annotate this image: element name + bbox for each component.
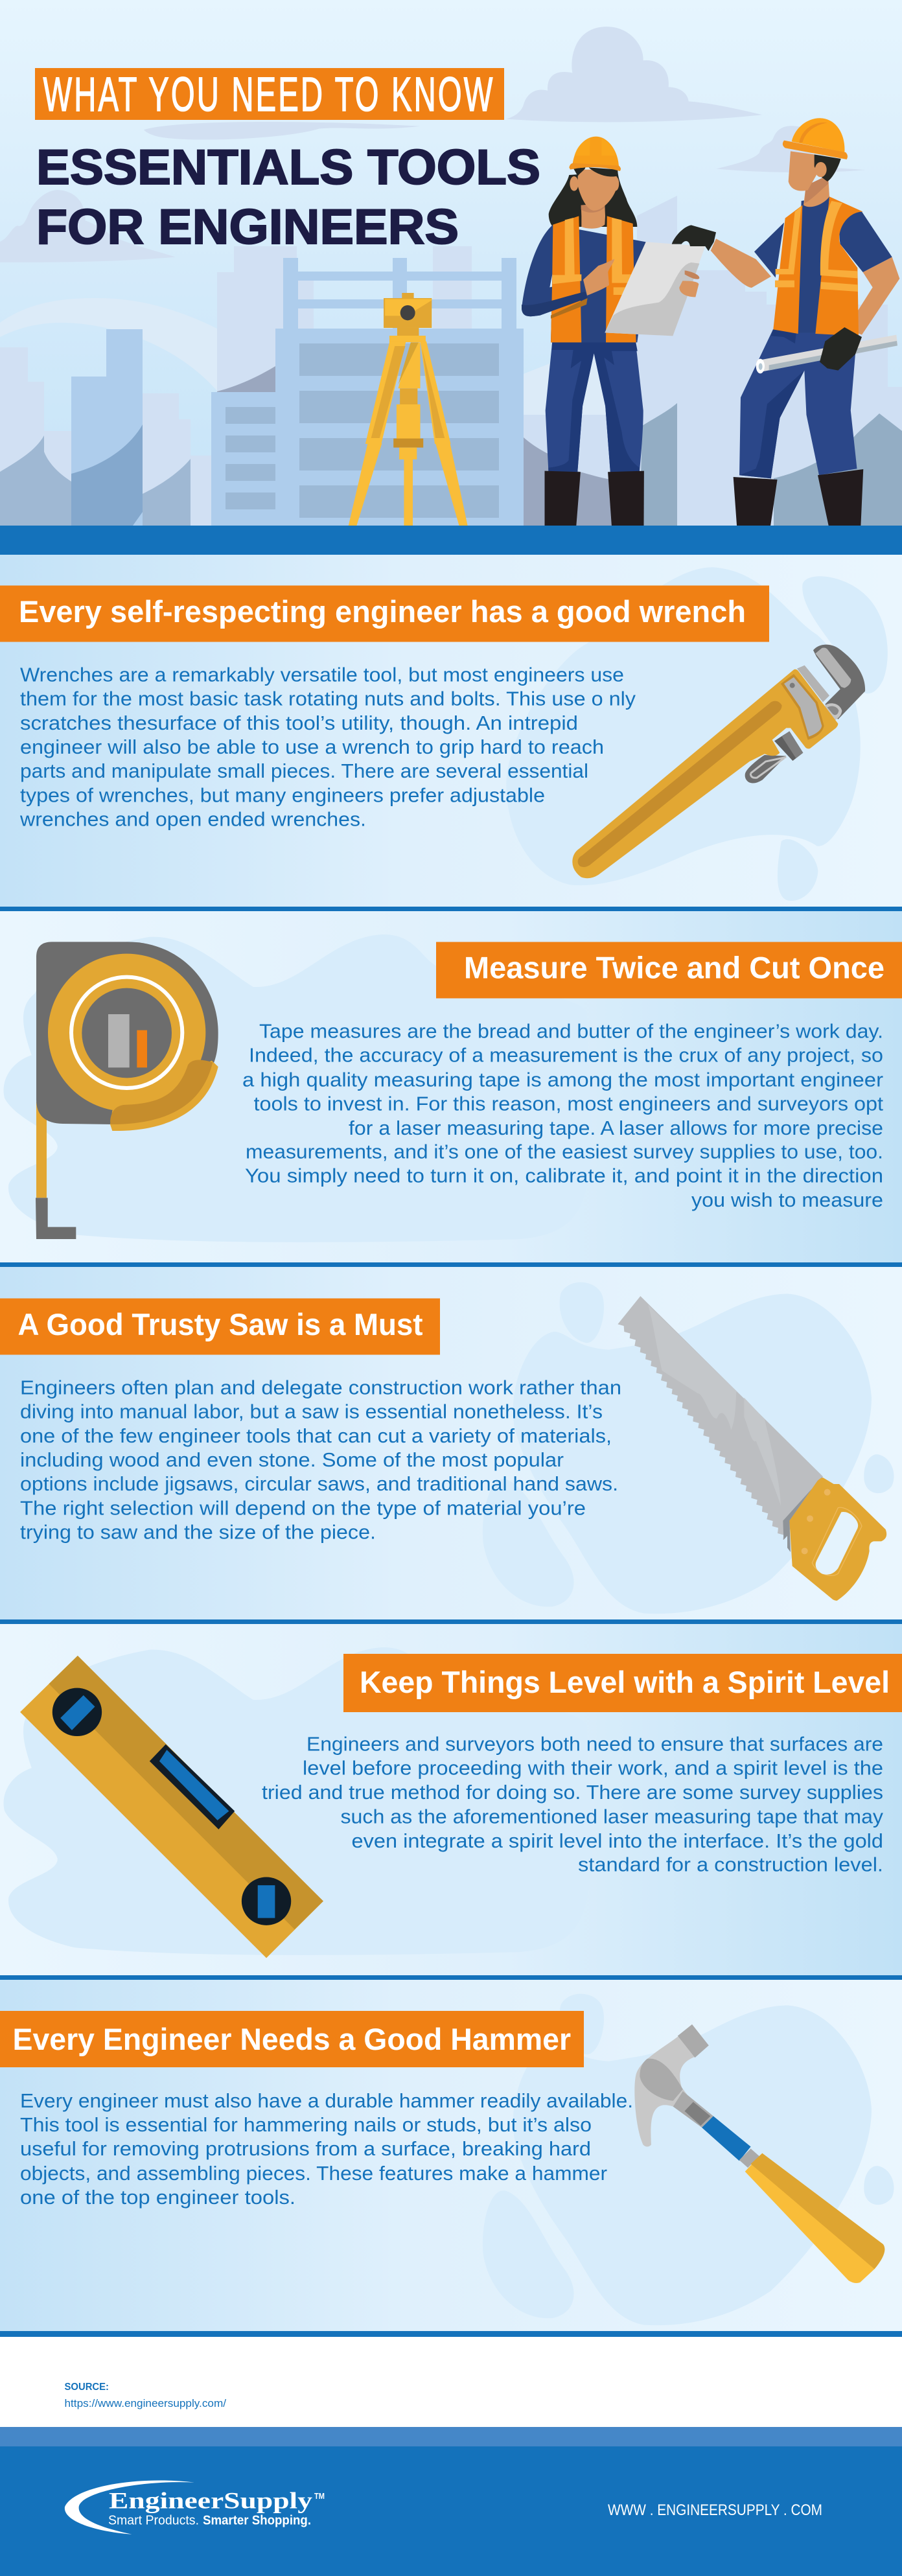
- text block: Indeed, the accuracy of a measurement is the crux of any project, so: [249, 1044, 883, 1067]
- panel: wrench: [0, 555, 902, 907]
- heading: [343, 1654, 902, 1712]
- text block: The right selection will depend on the type of material you’re: [20, 1496, 586, 1519]
- icon: pipe wrench: [572, 645, 865, 878]
- title tag: [35, 67, 504, 121]
- divider bar: [0, 1619, 902, 1624]
- heading: [0, 1299, 440, 1354]
- footer: [0, 2427, 902, 2576]
- text block: for a laser measuring tape. A laser allows for more precise: [349, 1117, 883, 1139]
- text block: Engineers often plan and delegate construction work rather than: [20, 1376, 621, 1398]
- man lower body: [734, 329, 863, 526]
- icon: spirit level: [20, 1656, 323, 1958]
- text block: Engineers and surveyors both need to ensure that surfaces are: [306, 1733, 883, 1755]
- icon: tape measure: [36, 942, 218, 1239]
- city skyline: [0, 196, 902, 526]
- source: SOURCE:: [65, 2382, 109, 2393]
- divider bar: [0, 907, 902, 911]
- logo: TM: [314, 2491, 325, 2501]
- heading: [0, 2011, 584, 2067]
- text block: Tape measures are the bread and butter of the engineer’s work day.: [259, 1020, 883, 1042]
- text block: [20, 2089, 633, 2209]
- heading: Every self-respecting engineer has a good wrench: [19, 594, 746, 629]
- text block: [262, 1733, 884, 1875]
- text block: engineer will also be able to use a wrench to grip hard to reach: [20, 736, 604, 758]
- logo: EngineerSupply: [109, 2488, 312, 2514]
- panel: hammer: [0, 1980, 902, 2331]
- text block: them for the most basic task rotating nuts and bolts. This use o nly: [20, 688, 636, 710]
- text block: including wood and even stone. Some of the most popular: [20, 1448, 564, 1471]
- clouds: [0, 27, 866, 262]
- divider bar: [0, 2331, 902, 2337]
- text block: wrenches and open ended wrenches.: [19, 808, 366, 831]
- heading: [436, 942, 902, 998]
- text block: types of wrenches, but many engineers prefer adjustable: [20, 783, 545, 806]
- text block: one of the few engineer tools that can cut a variety of materials,: [20, 1424, 612, 1447]
- icon: theodolite on tripod: [349, 293, 468, 526]
- text block: one of the top engineer tools.: [20, 2186, 295, 2209]
- text block: [242, 1020, 883, 1211]
- divider bar: [0, 1262, 902, 1267]
- text block: such as the aforementioned laser measuring tape that may: [341, 1805, 884, 1828]
- figure: female engineer: [522, 137, 705, 526]
- heading: Measure Twice and Cut Once: [464, 951, 885, 985]
- text block: even integrate a spirit level into the interface. It’s the gold: [351, 1829, 883, 1852]
- logo: Smarter Shopping.: [203, 2514, 311, 2528]
- text block: useful for removing protrusions from a surface, breaking hard: [20, 2137, 591, 2160]
- website: WWW . ENGINEERSUPPLY . COM: [608, 2501, 822, 2519]
- divider bar: [0, 1975, 902, 1980]
- hero base bar: [0, 526, 902, 555]
- text block: objects, and assembling pieces. These features make a hammer: [20, 2162, 607, 2185]
- text block: measurements, and it’s one of the easiest survey supplies to use, too.: [246, 1140, 883, 1163]
- icon: hammer: [634, 2025, 885, 2283]
- panel: tape measure: [0, 911, 902, 1262]
- text block: This tool is essential for hammering nails or studs, but it’s also: [20, 2113, 592, 2136]
- heading: Every Engineer Needs a Good Hammer: [13, 2022, 571, 2056]
- text block: you wish to measure: [691, 1189, 883, 1211]
- text block: standard for a construction level.: [578, 1853, 883, 1875]
- text block: trying to saw and the size of the piece.: [20, 1521, 376, 1544]
- main title: ESSENTIALS TOOLS: [36, 140, 540, 195]
- title tag: WHAT YOU NEED TO KNOW: [43, 67, 495, 121]
- heading: Keep Things Level with a Spirit Level: [360, 1665, 890, 1699]
- text block: level before proceeding with their work, and a spirit level is the: [303, 1757, 883, 1780]
- text block: [19, 664, 636, 831]
- woman lower body: [544, 342, 644, 526]
- hero banner: [0, 0, 902, 555]
- text block: Every engineer must also have a durable hammer readily available.: [20, 2089, 633, 2112]
- logo: Smart Products.: [108, 2514, 199, 2528]
- text block: a high quality measuring tape is among the most important engineer: [242, 1069, 883, 1091]
- text block: diving into manual labor, but a saw is essential nonetheless. It’s: [20, 1400, 603, 1423]
- text block: tried and true method for doing so. There are some survey supplies: [262, 1781, 883, 1804]
- heading: [0, 586, 769, 642]
- source: https://www.engineersupply.com/: [65, 2397, 226, 2409]
- icon: hand saw: [618, 1296, 886, 1601]
- main title: [36, 140, 540, 255]
- text block: Wrenches are a remarkably versatile tool, but most engineers use: [20, 664, 624, 686]
- text block: scratches thesurface of this tool’s utility, though. An intrepid: [20, 712, 578, 734]
- text block: tools to invest in. For this reason, most engineers and surveyors opt: [254, 1093, 883, 1115]
- text block: options include jigsaws, circular saws, and traditional hand saws.: [20, 1472, 618, 1495]
- main title: FOR ENGINEERS: [36, 200, 459, 255]
- text block: You simply need to turn it on, calibrate it, and point it in the direction: [245, 1165, 883, 1187]
- panel: spirit level: [0, 1624, 902, 1975]
- logo: [65, 2480, 325, 2535]
- source: [65, 2382, 226, 2409]
- building under construction: [211, 258, 524, 526]
- heading: A Good Trusty Saw is a Must: [18, 1307, 423, 1341]
- text block: parts and manipulate small pieces. There are several essential: [20, 760, 588, 782]
- figure: male engineer: [672, 118, 899, 526]
- panel: saw: [0, 1267, 902, 1619]
- text block: [20, 1376, 621, 1544]
